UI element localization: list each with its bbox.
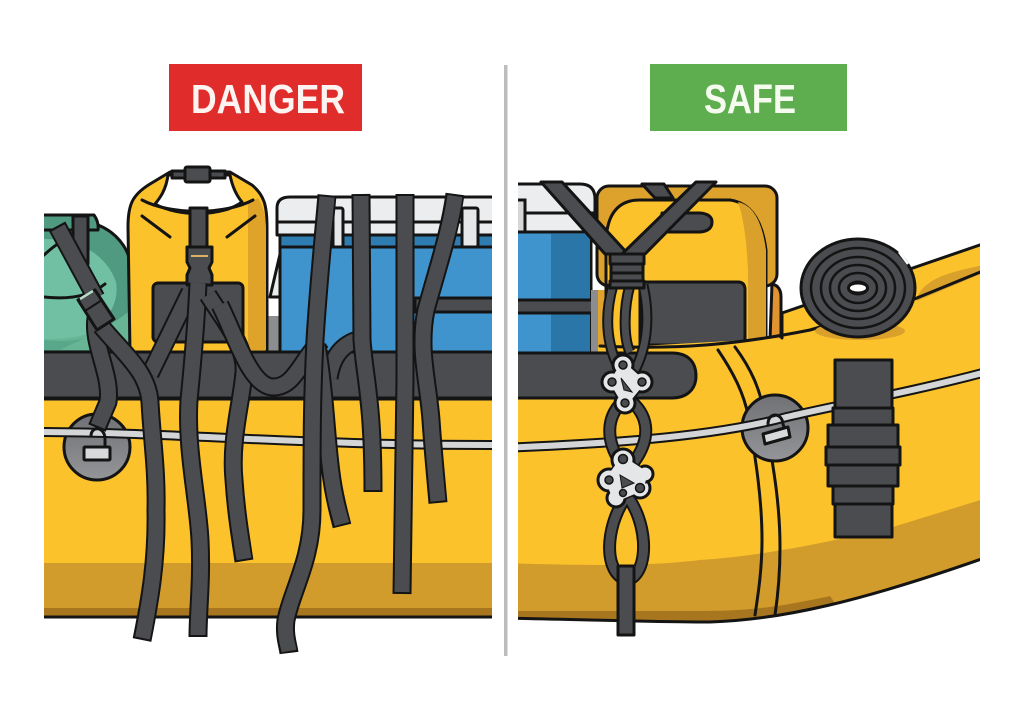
- icon: upper carabiner cluster: [602, 355, 652, 413]
- icon: neatly bundled strap: [826, 360, 900, 537]
- icon: yellow dry bag: [128, 167, 267, 352]
- strap: diagonal from buckle into long hanging strap 1: [101, 326, 156, 640]
- heading: safe label: [650, 64, 847, 131]
- strap: hanging strap 6: [361, 194, 373, 492]
- icon: grey D-ring disc: [742, 395, 808, 461]
- gear and boat, danger side: [30, 167, 510, 617]
- strap: hanging strap 8: [423, 194, 455, 503]
- strap: tail below lower loop: [618, 566, 634, 635]
- gear and boat, safe side: [500, 184, 990, 640]
- strap: looped strap across band: [220, 305, 322, 387]
- strap: Y harness arms: [541, 182, 716, 254]
- icon: lower carabiner cluster: [598, 449, 653, 507]
- icon: green bag: [44, 214, 128, 350]
- strap: long curling strap 4: [285, 195, 327, 653]
- panel: danger scene: [30, 167, 510, 653]
- loose straps tangle: [57, 194, 455, 653]
- infographic: danger vs safe strap rigging: [44, 64, 980, 656]
- strap: short loop into strap 6: [329, 338, 364, 378]
- strap: wrapped knot: [610, 254, 644, 288]
- icon: coiled strap: [801, 239, 915, 337]
- icon: yellow backpack: [597, 184, 781, 352]
- icon: D-ring clip: [84, 429, 110, 460]
- icon: cooler: [268, 197, 505, 352]
- boat hull, danger side: [30, 352, 510, 617]
- strap: short vertical tab on green bag: [73, 216, 88, 264]
- heading: safe label: SAFE: [704, 76, 796, 122]
- strap: branch dropping over D-ring: [95, 318, 109, 428]
- safety rope, danger side: [30, 432, 510, 445]
- strap: upper twin loops: [608, 285, 647, 372]
- icon: grey D-ring disc: [64, 414, 130, 480]
- safety rope, safe side: [500, 371, 990, 448]
- heading: danger label: [169, 64, 362, 131]
- strap: hanging strap 3: [208, 295, 244, 561]
- strap: long hanging strap 2: [189, 283, 201, 637]
- strap: left branch from dry bag buckle: [150, 292, 190, 374]
- strap: middle twisted loop: [610, 402, 646, 462]
- strap: across green bag: [57, 226, 96, 298]
- icon: D-ring clip: [763, 415, 790, 444]
- strap: hanging strap 5: [317, 345, 342, 526]
- icon: buckle on green bag strap: [78, 290, 114, 330]
- boat hull, safe side: [518, 244, 980, 624]
- icon: cooler: [510, 184, 598, 354]
- secured Y strap with knot and carabiners: [541, 182, 716, 635]
- strap: hanging strap 7: [402, 194, 405, 594]
- center divider: [504, 65, 508, 656]
- panel: safe scene: [500, 182, 990, 640]
- strap: lower teardrop loop: [610, 496, 644, 578]
- heading: danger label: DANGER: [191, 76, 345, 122]
